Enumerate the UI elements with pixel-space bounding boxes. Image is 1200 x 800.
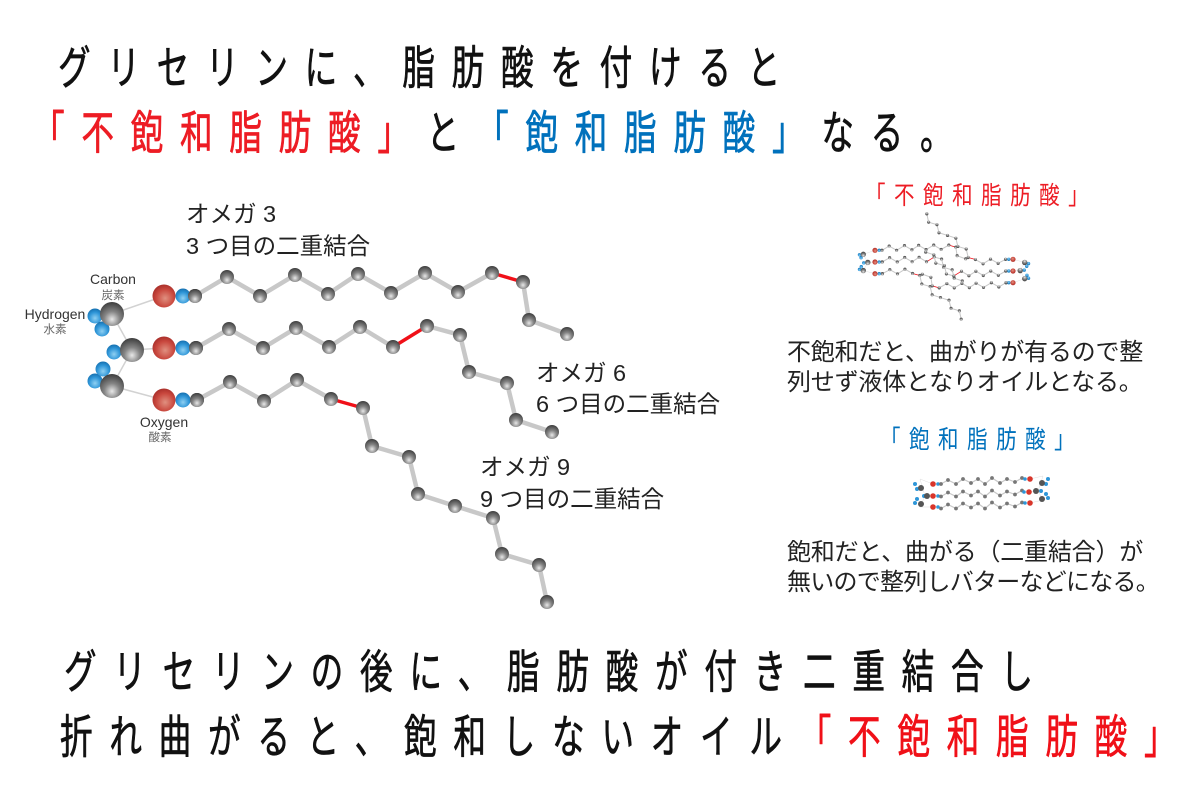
omega 9 chain [190, 373, 554, 609]
label: hydrogen [25, 306, 85, 336]
omega 6 chain [189, 319, 559, 439]
text: saturated explanation: 飽和だと、曲がる（二重結合）が [787, 539, 1143, 566]
text: unsaturated explanation [787, 339, 1143, 396]
label: carbon: 炭素 [102, 288, 124, 302]
label: omega 9: オメガ 9 [480, 454, 570, 480]
heading: unsaturated fatty acid: 「不飽和脂肪酸」 [865, 181, 1097, 209]
diagram: omega fatty acid molecule [88, 266, 574, 609]
label: omega 3: オメガ 3 [186, 201, 276, 227]
right glycerol head [1022, 476, 1050, 506]
glycerol carbon and hydrogen atoms [88, 302, 144, 398]
bottom text line 1: グリセリンの後に、脂肪酸が付き二重結合し [64, 648, 1050, 698]
label: omega 6 [536, 360, 720, 417]
left glycerol head [913, 479, 940, 510]
label: oxygen [140, 414, 188, 444]
bottom text line 2: 折れ曲がると、飽和しないオイル「不飽和脂肪酸」 [60, 713, 1193, 763]
label: hydrogen: Hydrogen [25, 306, 85, 322]
label: oxygen: 酸素 [148, 430, 172, 444]
heading: saturated fatty acid: 「飽和脂肪酸」 [880, 425, 1083, 453]
label: carbon [90, 271, 136, 302]
text: unsaturated explanation: 不飽和だと、曲がりが有るので整 [787, 339, 1143, 366]
glycerol backbone bonds [112, 296, 164, 400]
label: hydrogen: 水素 [44, 323, 66, 336]
diagram: unsaturated molecules intertwined [858, 212, 1030, 321]
label: omega 3: 3 つ目の二重結合 [186, 233, 370, 259]
label: omega 6: 6 つ目の二重結合 [536, 391, 720, 417]
label: omega 9: 9 つ目の二重結合 [480, 486, 664, 512]
label: carbon: Carbon [90, 271, 136, 287]
title line 2: 「不飽和脂肪酸」と「飽和脂肪酸」なる。 [32, 109, 969, 159]
text: unsaturated explanation: 列せず液体となりオイルとなる。 [787, 369, 1143, 396]
label: omega 9 [480, 454, 664, 512]
omega 3 chain [188, 266, 574, 341]
oxygen atoms with hydrogen [152, 284, 204, 412]
label: oxygen: Oxygen [140, 414, 188, 430]
label: omega 3 [186, 201, 370, 259]
text: saturated explanation [787, 539, 1159, 596]
text: saturated explanation: 無いので整列しバターなどになる。 [787, 569, 1159, 596]
label: omega 6: オメガ 6 [536, 360, 626, 386]
saturated chains [939, 476, 1024, 510]
diagram: saturated molecules aligned [913, 476, 1050, 510]
title line 1: グリセリンに、脂肪酸を付けると [58, 44, 797, 94]
